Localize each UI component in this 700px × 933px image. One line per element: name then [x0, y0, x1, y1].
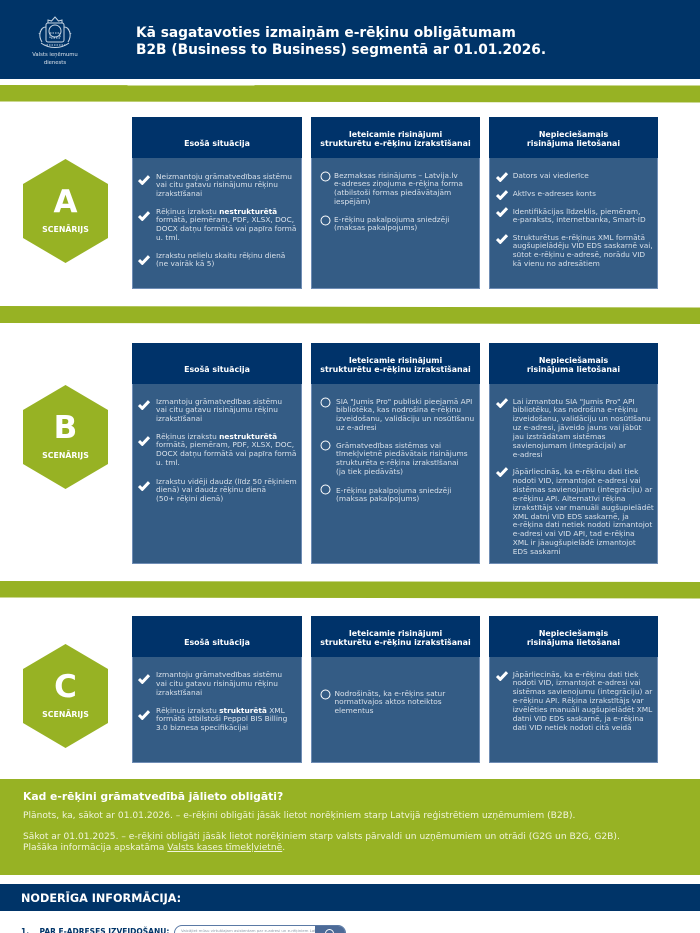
column heading: [132, 117, 302, 158]
column heading: [132, 343, 302, 384]
panel: C current situation: [132, 616, 302, 763]
item: [138, 251, 285, 268]
item: Lai izmantotu SIA "Jumis Pro" API: [513, 397, 635, 406]
column heading: risinājuma lietošanai: [527, 138, 620, 148]
item: Nodrošināts, ka e-rēķins satur: [334, 689, 445, 698]
item: (ne vairāk kā 5): [156, 259, 214, 268]
item: Rēķinus izrakstu nestrukturētā: [156, 207, 277, 216]
item: bibliotēku, kas nodrošina e-rēķinu: [513, 405, 638, 414]
paragraph 2: Plašāka informācija apskatāma Valsts kases tīmekļvietnē.: [23, 843, 285, 853]
panel: when e-invoices are mandatory: [0, 779, 700, 875]
item: kā vienu no adresātiem: [513, 259, 600, 268]
item: augšupielādēju VID EDS saskarnē vai,: [513, 241, 653, 250]
item: 3.0 biznesa specifikācijai: [156, 723, 248, 732]
item: Neizmantoju grāmatvedības sistēmu: [156, 172, 292, 181]
logo text: dienests: [44, 60, 66, 66]
column heading: Nepieciešamais: [539, 356, 608, 364]
bar title: NODERĪGA INFORMĀCIJA:: [21, 892, 181, 905]
item: e-rēķina dati netiek nodoti izmantojot: [513, 520, 652, 529]
column heading: strukturētu e-rēķinu izrakstīšanai: [320, 364, 471, 374]
item: uz e-adresi: [336, 423, 377, 432]
item: [320, 689, 446, 715]
column heading: [311, 117, 480, 158]
item: Izrakstu vidēji daudz (līdz 50 rēķiniem: [156, 477, 297, 486]
item: Izmantoju grāmatvedības sistēmu: [156, 670, 282, 679]
item: [496, 171, 589, 182]
item: [496, 670, 652, 732]
useful information item 1: [21, 925, 346, 933]
item: Rēķinus izrakstu strukturētā XML: [156, 706, 285, 715]
column heading: Esošā situācija: [184, 364, 250, 374]
column heading: risinājuma lietošanai: [527, 638, 620, 646]
item: E-rēķinu pakalpojuma sniedzēji: [334, 215, 449, 224]
item: uz e-adresi, jāveido jauns vai jābūt: [513, 423, 642, 432]
item: sistēmas savienojumu (integrāciju) ar: [513, 687, 652, 696]
panel: B requirements: [489, 343, 658, 564]
item: u. tml.: [156, 458, 180, 467]
item: EDS saskarni: [513, 547, 561, 556]
panel: A current situation: [132, 117, 302, 289]
column heading: Ieteicamie risinājumi: [349, 130, 442, 138]
item: [320, 484, 451, 503]
item: izveidošanu, validāciju un nosūtīšanu: [513, 414, 651, 423]
item: [496, 189, 596, 200]
item: [496, 207, 646, 224]
item: izrakstīšanai: [156, 189, 202, 198]
item: XML datni VID EDS saskarnē, ja: [513, 512, 629, 521]
scenario letter C: C: [54, 669, 77, 705]
item: e-adreses ziņojuma e-rēķina forma: [334, 179, 463, 188]
icon: coat of arms: [38, 16, 72, 48]
item: formātā atbilstoši Peppol BIS Billing: [156, 714, 287, 723]
title: [136, 24, 546, 58]
item: strukturēta e-rēķina izrakstīšanai: [336, 458, 459, 467]
item: Bezmaksas risinājums – Latvija.lv: [334, 171, 458, 180]
item: elementus: [334, 706, 374, 715]
item: [138, 706, 287, 732]
item: (50+ rēķini dienā): [156, 494, 223, 503]
item: bibliotēka, kas nodrošina e-rēķinu: [336, 405, 461, 414]
item: [320, 397, 474, 432]
scenario letter B: B: [54, 410, 77, 446]
header banner: [0, 0, 700, 79]
item: [138, 397, 282, 423]
item: (maksas pakalpojums): [336, 494, 419, 503]
item: [320, 171, 463, 206]
title: Kā sagatavoties izmaiņām e-rēķinu obligātumam: [136, 24, 516, 40]
paragraph 2: Sākot ar 01.01.2025. – e-rēķini obligāti jāsāk lietot norēķiniem starp valsts pārvaldi un uzņēmumiem un otrādi (G2G un B2G, G2B).: [23, 832, 620, 842]
paragraph 2: [23, 832, 620, 853]
item: [138, 172, 292, 198]
item: SIA "Jumis Pro" publiski pieejamā API: [336, 397, 472, 406]
scenario letter A: A: [54, 184, 78, 220]
column heading: Nepieciešamais: [539, 628, 608, 638]
hexagon: scenario B: [23, 385, 108, 489]
item: [138, 670, 282, 697]
panel: C requirements: [489, 616, 658, 763]
item: [138, 432, 296, 467]
item: izvēlēties manuāli augšupielādēt XML: [513, 705, 652, 714]
item: Identifikācijas līdzeklis, piemēram,: [513, 207, 640, 216]
column heading: Nepieciešamais: [539, 130, 608, 138]
item: vai citu gatavu risinājumu rēķinu: [156, 679, 278, 688]
item: vai citu gatavu risinājumu rēķinu: [156, 405, 278, 414]
item: [496, 467, 654, 556]
item: e-rēķinu API. Rēķina izrakstītājs var: [513, 696, 644, 705]
hexagon: scenario A: [23, 159, 108, 263]
column heading: Esošā situācija: [184, 138, 250, 148]
item: e-adresi vai VID API, tad e-rēķina: [513, 529, 635, 538]
item: (atbilstoši formas piedāvātajām: [334, 188, 451, 197]
item: DOCX datņu formātā vai papīra formā: [156, 449, 296, 458]
panel heading: Kad e-rēķini grāmatvedībā jālieto obligāti?: [23, 790, 283, 803]
panel: B recommended solutions: [311, 343, 480, 564]
search button: [315, 926, 347, 933]
panel: A recommended solutions: [311, 117, 480, 289]
hexagon: scenario C: [23, 644, 108, 748]
item: vai citu gatavu risinājumu rēķinu: [156, 180, 278, 189]
item: normatīvajos aktos noteiktos: [334, 697, 442, 706]
item: E-rēķinu pakalpojuma sniedzēji: [336, 486, 451, 495]
scenario label B: SCENĀRIJS: [42, 451, 89, 460]
item: u. tml.: [156, 233, 180, 242]
item: formātā, piemēram, PDF, XLSX, DOC,: [156, 440, 294, 449]
item: iespējām): [334, 197, 370, 206]
title: B2B (Business to Business) segmentā ar 01.01.2026.: [136, 42, 546, 58]
item: izrakstītājs var manuāli augšupielādēt: [513, 503, 654, 512]
item: jau izstrādātam sistēmas: [513, 432, 606, 441]
search placeholder: Vaicājiet mūsu virtuālajam asistentam par e-adresi un e-rēķiniem Latvijā: [181, 928, 323, 933]
column heading: Esošā situācija: [184, 638, 250, 646]
panel: C recommended solutions: [311, 616, 480, 763]
column heading: [489, 117, 658, 158]
item: Aktīvs e-adreses konts: [513, 189, 596, 198]
item: sūtot e-rēķinu e-adresē, norādu VID: [513, 250, 645, 259]
item: Jāpārliecinās, ka e-rēķinu dati tiek: [513, 467, 638, 476]
icon: magnifier: [325, 929, 334, 933]
item: XML ir jāaugšupielādē izmantojot: [513, 538, 636, 547]
item: izrakstīšanai: [156, 688, 202, 697]
paragraph 1: Plānots, ka, sākot ar 01.01.2026. – e-rēķini obligāti jāsāk lietot norēķiniem starp Latvijā reģistrētiem uzņēmumiem (B2B).: [23, 810, 575, 820]
item: Izmantoju grāmatvedības sistēmu: [156, 397, 282, 406]
item: DOCX datņu formātā vai papīra formā: [156, 224, 296, 233]
useful information heading bar: [0, 884, 700, 911]
column heading: [489, 343, 658, 384]
item: nodoti VID, izmantojot e-adresi vai: [513, 476, 641, 485]
panel: B current situation: [132, 343, 302, 564]
item: e-rēķinu API. Alternatīvi rēķina: [513, 494, 625, 503]
item: dati VID netiek nodoti citā veidā: [513, 723, 632, 732]
item: [496, 233, 653, 268]
item: [138, 207, 296, 242]
scenario label A: SCENĀRIJS: [42, 225, 89, 234]
column heading: strukturētu e-rēķinu izrakstīšanai: [320, 638, 471, 646]
item: [138, 477, 297, 503]
item: [496, 397, 651, 459]
item: dienā) vai daudz rēķinu dienā: [156, 485, 266, 494]
logo: [32, 16, 78, 66]
column heading: strukturētu e-rēķinu izrakstīšanai: [320, 138, 471, 148]
item: izrakstīšanai: [156, 414, 202, 423]
column heading: risinājuma lietošanai: [527, 364, 620, 374]
column heading: Ieteicamie risinājumi: [349, 628, 442, 638]
item: Jāpārliecinās, ka e-rēķinu dati tiek: [513, 670, 638, 679]
item: Grāmatvedības sistēmas vai: [336, 441, 441, 450]
search box: [174, 925, 346, 933]
item: nodoti VID, izmantojot e-adresi vai: [513, 678, 641, 687]
item: Dators vai viedierīce: [513, 171, 589, 180]
item: Strukturētus e-rēķinus XML formātā: [513, 233, 645, 242]
column heading: [489, 616, 658, 657]
item: e-paraksts, internetbanka, Smart-ID: [513, 215, 646, 224]
item: Izrakstu nelielu skaitu rēķinu dienā: [156, 251, 285, 260]
item: e-adresi: [513, 450, 542, 459]
panel: A requirements: [489, 117, 658, 289]
column heading: [311, 616, 480, 657]
item: datni VID EDS saskarnē, ja e-rēķina: [513, 714, 644, 723]
scenario label C: SCENĀRIJS: [42, 710, 89, 719]
logo text: [32, 52, 78, 66]
item: tīmekļvietnē piedāvātais risinājums: [336, 449, 468, 458]
logo text: Valsts ieņēmumu: [32, 52, 78, 58]
item: formātā, piemēram, PDF, XLSX, DOC,: [156, 215, 294, 224]
item: (ja tiek piedāvāts): [336, 467, 403, 476]
item: [320, 215, 449, 232]
item: (maksas pakalpojums): [334, 223, 417, 232]
green band 3: [0, 581, 700, 598]
column heading: Ieteicamie risinājumi: [349, 356, 442, 364]
item: sistēmas savienojumu (integrāciju) ar: [513, 485, 652, 494]
item: [320, 440, 468, 476]
green band 2: [0, 306, 700, 324]
item: Rēķinus izrakstu nestrukturētā: [156, 432, 277, 441]
column heading: [132, 616, 302, 657]
item: izveidošanu, validāciju un nosūtīšanu: [336, 414, 474, 423]
item: savienojumam (integrācijai) ar: [513, 441, 626, 450]
column heading: [311, 343, 480, 384]
green band 1: [0, 85, 700, 102]
